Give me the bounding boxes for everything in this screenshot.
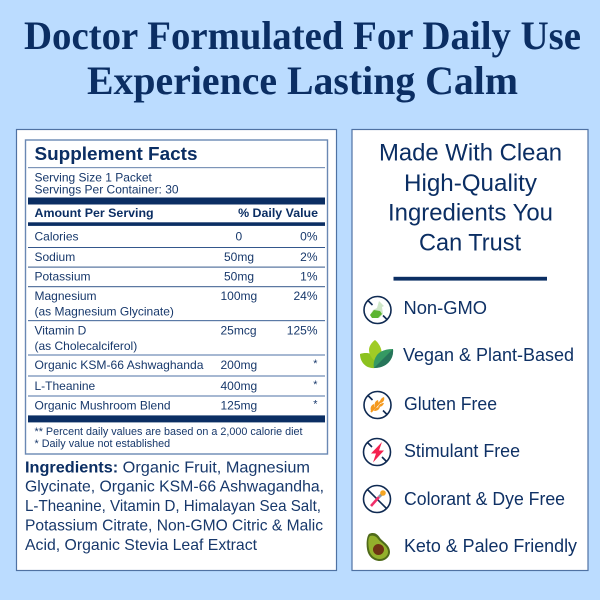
row: potassium: 50mg	[224, 270, 254, 284]
title	[24, 13, 581, 103]
row: vitamin D: Vitamin D	[34, 324, 87, 338]
row: sodium: 50mg	[224, 250, 254, 264]
serving information: Serving Size 1 Packet	[34, 170, 153, 184]
row: ashwagandha: Organic KSM-66 Ashwaghanda	[34, 358, 204, 372]
item: stimulant free	[364, 438, 520, 466]
serving information	[34, 170, 179, 196]
panel heading: Can Trust	[419, 230, 521, 257]
table heading: Supplement Facts	[34, 144, 198, 164]
row: sodium	[34, 250, 318, 264]
row: L-theanine	[34, 379, 318, 393]
row: potassium: 1%	[300, 270, 318, 284]
item: gluten free: Gluten Free	[404, 394, 497, 414]
item: stimulant free: Stimulant Free	[404, 441, 520, 461]
row: ashwagandha	[34, 358, 318, 372]
panel heading: High-Quality	[404, 170, 538, 197]
icon: dropper crossed out	[364, 486, 390, 512]
row: calories: 0	[236, 230, 242, 244]
ingredients text: Potassium Citrate, Non-GMO Citric & Malic	[25, 518, 323, 534]
row: sodium: 2%	[300, 250, 318, 264]
footnotes: * Daily value not established	[34, 438, 170, 450]
icon: avocado	[367, 533, 390, 561]
item: non-GMO: Non-GMO	[404, 298, 487, 318]
item: vegan	[360, 340, 574, 368]
item: vegan: Vegan & Plant-Based	[403, 345, 574, 365]
icon: green leaves	[360, 340, 393, 368]
row: vitamin D: (as Cholecalciferol)	[34, 339, 137, 353]
row: vitamin D	[34, 324, 318, 353]
row: potassium: Potassium	[34, 270, 91, 284]
item: keto and paleo	[367, 533, 578, 561]
icon: flask crossed out	[364, 296, 391, 324]
title: Doctor Formulated For Daily Use	[24, 13, 581, 58]
ingredients text: Ingredients: Organic Fruit, Magnesium	[25, 459, 310, 476]
row: magnesium: 24%	[293, 289, 318, 303]
panel heading: Made With Clean	[379, 140, 562, 167]
panel: supplement facts and ingredients	[16, 130, 336, 570]
ingredients text	[25, 459, 324, 554]
row: magnesium: (as Magnesium Glycinate)	[34, 304, 174, 318]
serving information: Servings Per Container: 30	[34, 182, 179, 196]
row: vitamin D: 125%	[287, 324, 318, 338]
ingredients text: Acid, Organic Stevia Leaf Extract	[25, 537, 258, 554]
row: magnesium	[34, 289, 318, 318]
row: calories	[34, 230, 318, 244]
panel heading	[379, 140, 562, 257]
icon: lightning bolt crossed out	[364, 438, 390, 466]
column headers: % Daily Value	[238, 206, 318, 220]
column headers: Amount Per Serving	[34, 206, 154, 220]
row: potassium	[34, 270, 318, 284]
row: L-theanine: *	[313, 379, 318, 391]
item: gluten free	[364, 392, 497, 418]
row: magnesium: 100mg	[220, 289, 257, 303]
row: ashwagandha: *	[313, 358, 318, 370]
row: sodium: Sodium	[34, 250, 75, 264]
footnotes	[34, 426, 302, 450]
row: vitamin D: 25mcg	[220, 324, 257, 338]
panel: clean ingredients claims	[352, 130, 588, 570]
title: Experience Lasting Calm	[87, 58, 518, 103]
ingredients text: Glycinate, Organic KSM-66 Ashwagandha,	[25, 479, 324, 496]
row: mushroom blend: *	[313, 398, 318, 410]
row: mushroom blend: 125mg	[220, 398, 257, 412]
row: L-theanine: 400mg	[220, 379, 257, 393]
icon: wheat crossed out	[364, 392, 391, 418]
column headers	[34, 206, 318, 220]
ingredients text: L-Theanine, Vitamin D, Himalayan Sea Salt,	[25, 498, 321, 515]
row: calories: 0%	[300, 230, 318, 244]
panel heading: Ingredients You	[388, 200, 553, 227]
supplement facts table	[26, 140, 328, 454]
item: keto and paleo: Keto & Paleo Friendly	[404, 536, 578, 556]
row: mushroom blend	[34, 398, 318, 412]
row: L-theanine: L-Theanine	[34, 379, 96, 393]
row: mushroom blend: Organic Mushroom Blend	[34, 398, 171, 412]
row: magnesium: Magnesium	[34, 289, 97, 303]
footnotes: ** Percent daily values are based on a 2,000 calorie diet	[34, 426, 302, 438]
item: colorant and dye free	[364, 486, 565, 512]
item: colorant and dye free: Colorant & Dye Free	[404, 489, 565, 509]
item: non-GMO	[364, 296, 487, 324]
row: calories: Calories	[34, 230, 79, 244]
row: ashwagandha: 200mg	[220, 358, 257, 372]
